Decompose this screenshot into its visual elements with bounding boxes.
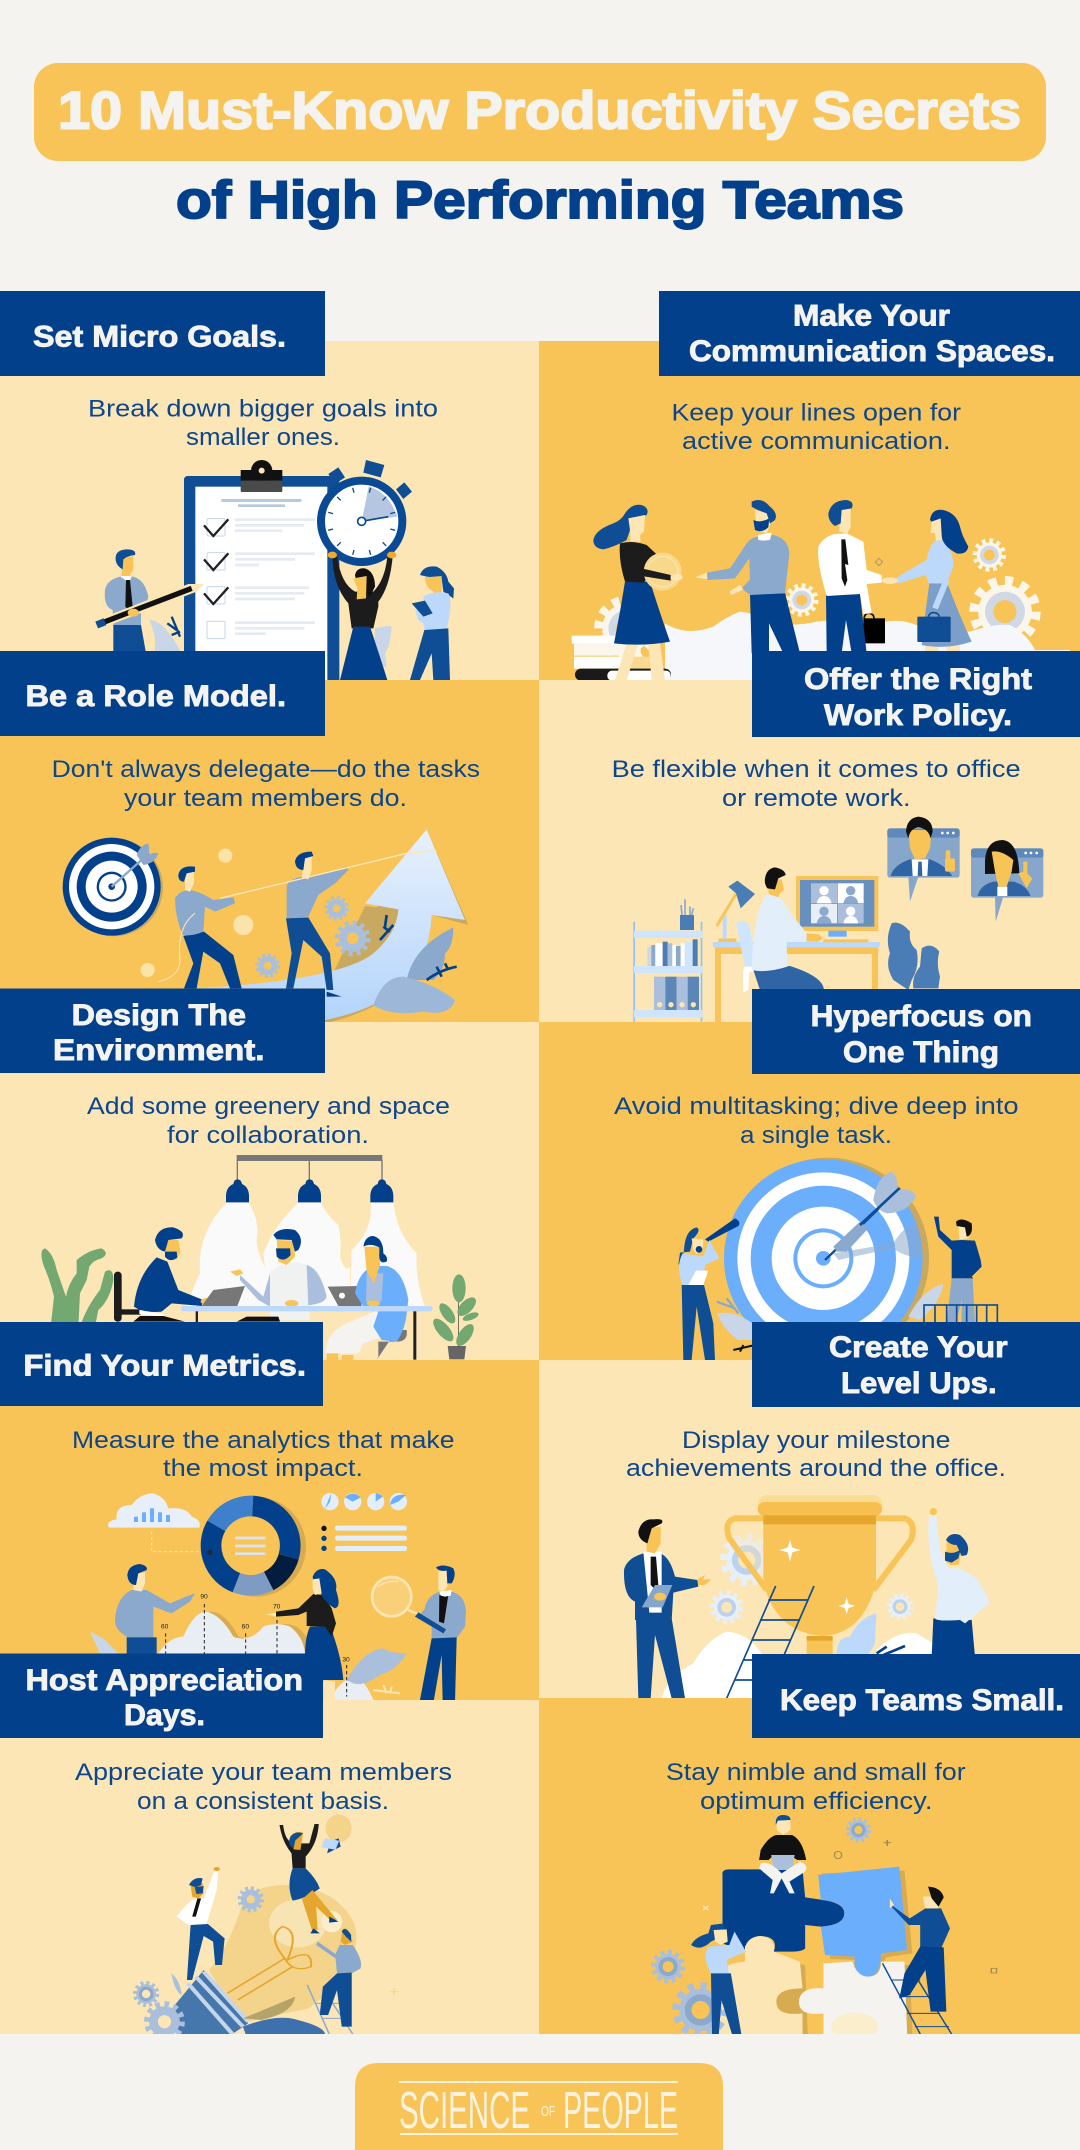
header: work policy <box>752 651 1080 737</box>
title pill <box>34 63 1046 161</box>
panel: level ups background <box>539 1360 1080 1698</box>
title line two: of High Performing Teams <box>176 171 904 230</box>
body text: find your metrics <box>72 1427 454 1482</box>
body text: communication spaces <box>672 400 961 455</box>
panel: set micro goals background <box>0 341 539 680</box>
body text: host appreciation days: Appreciate your team members <box>75 1759 452 1786</box>
illustration: analytics dashboard with team: 90 <box>200 1594 208 1601</box>
footer logo: science of people: SCIENCE <box>399 2082 530 2140</box>
illustration: lightbulb celebration <box>135 1814 398 2039</box>
illustration: team shaking hands <box>572 500 1070 681</box>
header: level ups: Create Your <box>829 1331 1008 1364</box>
illustration: analytics dashboard with team <box>90 1493 466 1703</box>
panel: communication spaces background <box>539 341 1080 680</box>
body text: find your metrics: Measure the analytics that make <box>72 1427 454 1454</box>
panel: work policy background <box>539 680 1080 1022</box>
panel: small teams background <box>539 1698 1080 2034</box>
footer logo: science of people: PEOPLE <box>563 2082 678 2140</box>
header: role model <box>0 651 325 736</box>
body text: level ups: achievements around the office. <box>626 1455 1006 1482</box>
body text: design the environment: for collaboration. <box>167 1122 369 1149</box>
body text: communication spaces: active communication. <box>682 428 950 455</box>
header: find your metrics <box>0 1322 323 1406</box>
header: host appreciation days: Days. <box>124 1699 205 1732</box>
header: hyperfocus: Hyperfocus on <box>811 1000 1032 1033</box>
body text: role model: Don't always delegate—do the tasks <box>52 756 480 783</box>
body text: host appreciation days: on a consistent basis. <box>137 1788 389 1815</box>
body text: find your metrics: the most impact. <box>163 1455 363 1482</box>
body text: set micro goals: smaller ones. <box>186 424 340 451</box>
body text: set micro goals <box>88 396 438 451</box>
illustration: team under pendant lamps <box>41 1155 480 1360</box>
illustration: analytics dashboard with team: 70 <box>273 1604 281 1611</box>
header: communication spaces: Make Your <box>793 300 950 332</box>
header: work policy: Work Policy. <box>824 699 1012 732</box>
body text: role model <box>52 756 480 812</box>
body text: design the environment <box>87 1093 450 1149</box>
illustration: pulling an arrow toward a target <box>63 829 468 1023</box>
illustration: team assembling a puzzle <box>653 1815 997 2041</box>
body text: work policy <box>612 756 1021 812</box>
header: communication spaces: Communication Spaces. <box>689 335 1055 368</box>
body text: communication spaces: Keep your lines open for <box>672 400 961 426</box>
header: hyperfocus: One Thing <box>843 1036 999 1069</box>
illustration: giant target with dart <box>678 1158 997 1360</box>
body text: hyperfocus: Avoid multitasking; dive deep into <box>614 1093 1019 1120</box>
illustration: analytics dashboard with team: 60 <box>161 1624 169 1631</box>
body text: level ups: Display your milestone <box>682 1427 950 1454</box>
illustration: analytics dashboard with team: 30 <box>342 1657 350 1664</box>
header: work policy: Offer the Right <box>804 663 1032 696</box>
panel: appreciation days background <box>0 1700 539 2034</box>
header: communication spaces <box>659 291 1080 376</box>
body text: hyperfocus: a single task. <box>740 1122 892 1149</box>
header: hyperfocus <box>752 989 1080 1074</box>
header: host appreciation days: Host Appreciation <box>26 1664 303 1697</box>
illustration: clipboard, stopwatch and team <box>95 460 454 690</box>
body text: work policy: Be flexible when it comes to office <box>612 756 1021 783</box>
body text: host appreciation days <box>75 1759 452 1815</box>
illustration: analytics dashboard with team: 60 <box>242 1624 249 1631</box>
header: role model: Be a Role Model. <box>26 680 286 713</box>
body text: keep teams small <box>666 1759 966 1815</box>
header: level ups: Level Ups. <box>841 1367 997 1400</box>
title line one: 10 Must-Know Productivity Secrets <box>58 82 1021 140</box>
header: host appreciation days <box>0 1654 323 1738</box>
body text: hyperfocus <box>614 1093 1019 1149</box>
body text: level ups <box>626 1427 1006 1482</box>
header: set micro goals <box>0 291 325 376</box>
panel: metrics background <box>0 1360 539 1700</box>
illustration: trophy and milestone celebration <box>624 1495 989 1698</box>
header: find your metrics: Find Your Metrics. <box>23 1350 306 1383</box>
body text: set micro goals: Break down bigger goals into <box>88 396 438 422</box>
body text: design the environment: Add some greenery and space <box>87 1093 450 1120</box>
header: design the environment: Design The <box>72 999 246 1032</box>
footer logo: science of people <box>355 2063 723 2150</box>
body text: work policy: or remote work. <box>722 785 910 812</box>
body text: role model: your team members do. <box>124 785 407 812</box>
header: keep teams small <box>752 1654 1080 1738</box>
header: keep teams small: Keep Teams Small. <box>780 1684 1064 1717</box>
header: level ups <box>752 1322 1080 1407</box>
panel: role model background <box>0 680 539 1022</box>
header: set micro goals: Set Micro Goals. <box>33 320 286 354</box>
body text: keep teams small: optimum efficiency. <box>700 1788 932 1815</box>
panel: design environment background <box>0 1022 539 1360</box>
header: design the environment: Environment. <box>53 1034 264 1067</box>
header: design the environment <box>0 988 325 1073</box>
footer logo: science of people: OF <box>541 2103 555 2120</box>
illustration: video call at a desk <box>633 817 1043 1023</box>
body text: keep teams small: Stay nimble and small for <box>666 1759 966 1786</box>
panel: hyperfocus background <box>539 1022 1080 1360</box>
